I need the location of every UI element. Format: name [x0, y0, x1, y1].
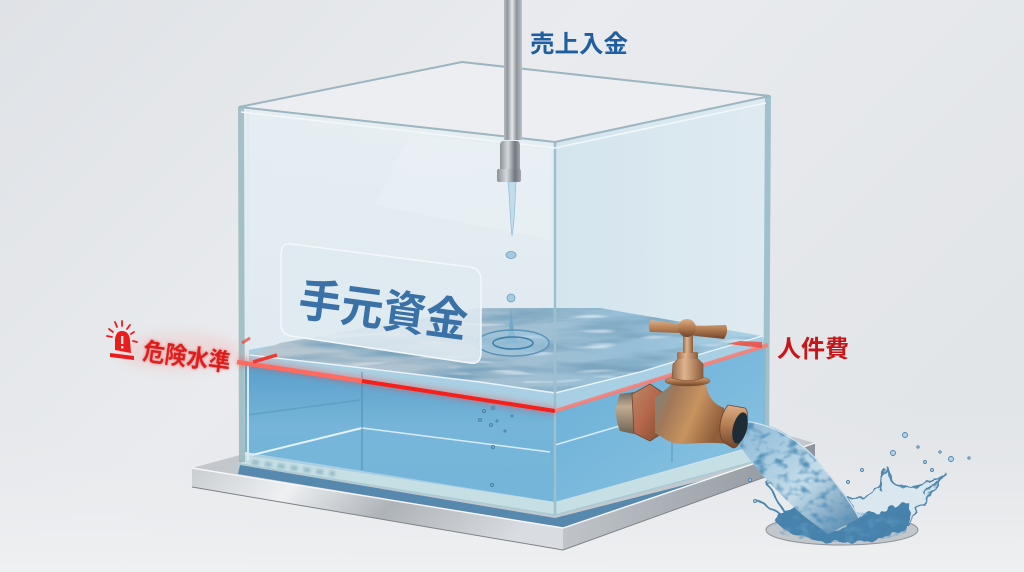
droplets: [748, 432, 970, 502]
metal base plate: [192, 432, 815, 550]
icon: alarm siren: [107, 321, 137, 360]
splash dark flecks: [774, 512, 908, 542]
label: 人件費: 人件費: [777, 336, 849, 363]
faucet: wall flange: [616, 392, 634, 434]
tank: water above danger line: [245, 308, 766, 412]
tank: glass floor rim: [242, 443, 768, 515]
label: 売上入金: 売上入金: [530, 31, 628, 58]
tank: right front face: [555, 96, 770, 515]
inflow pipe: [497, 0, 522, 182]
faucet: hex nut: [632, 384, 664, 441]
tank: refraction marks on rim: [252, 462, 335, 474]
tank: left water body: [245, 365, 555, 502]
faucet: handle knob: [678, 319, 696, 337]
left red glow: [118, 334, 242, 370]
drain and splash: [748, 432, 970, 545]
faucet: nut: [672, 358, 703, 380]
tank: left front face: [239, 107, 555, 515]
small bubbles: [478, 406, 513, 486]
outflow water stream: [740, 420, 860, 534]
splash tendrils: [755, 468, 945, 520]
drain ring: [766, 515, 918, 545]
faucet: stem collar: [677, 352, 698, 359]
faucet: T handle: [649, 320, 727, 339]
glass name plate: [281, 244, 481, 363]
faucet: base disc: [665, 376, 710, 386]
faucet: spout opening: [729, 411, 751, 445]
tank: water surface: [250, 308, 762, 394]
tank: back and top opening: [239, 62, 770, 142]
faucet: [616, 319, 751, 448]
tank: inner floor edges: [247, 372, 672, 502]
splash pool: [776, 502, 910, 543]
splash crown: [848, 467, 945, 525]
tank: glass edges: [239, 62, 770, 515]
faucet: body and spout: [655, 384, 728, 444]
falling water drops and ripple: [477, 182, 549, 356]
red danger line: [237, 338, 768, 411]
glass tank: [239, 62, 770, 515]
faucet: stem: [683, 335, 693, 353]
plate label: 手元資金: 手元資金: [296, 273, 471, 347]
tank: back wall reflection: [375, 135, 550, 240]
faucet: spout collar: [720, 405, 747, 448]
tank: right water body: [555, 345, 766, 502]
label: 危険水準: 危険水準: [141, 338, 232, 377]
